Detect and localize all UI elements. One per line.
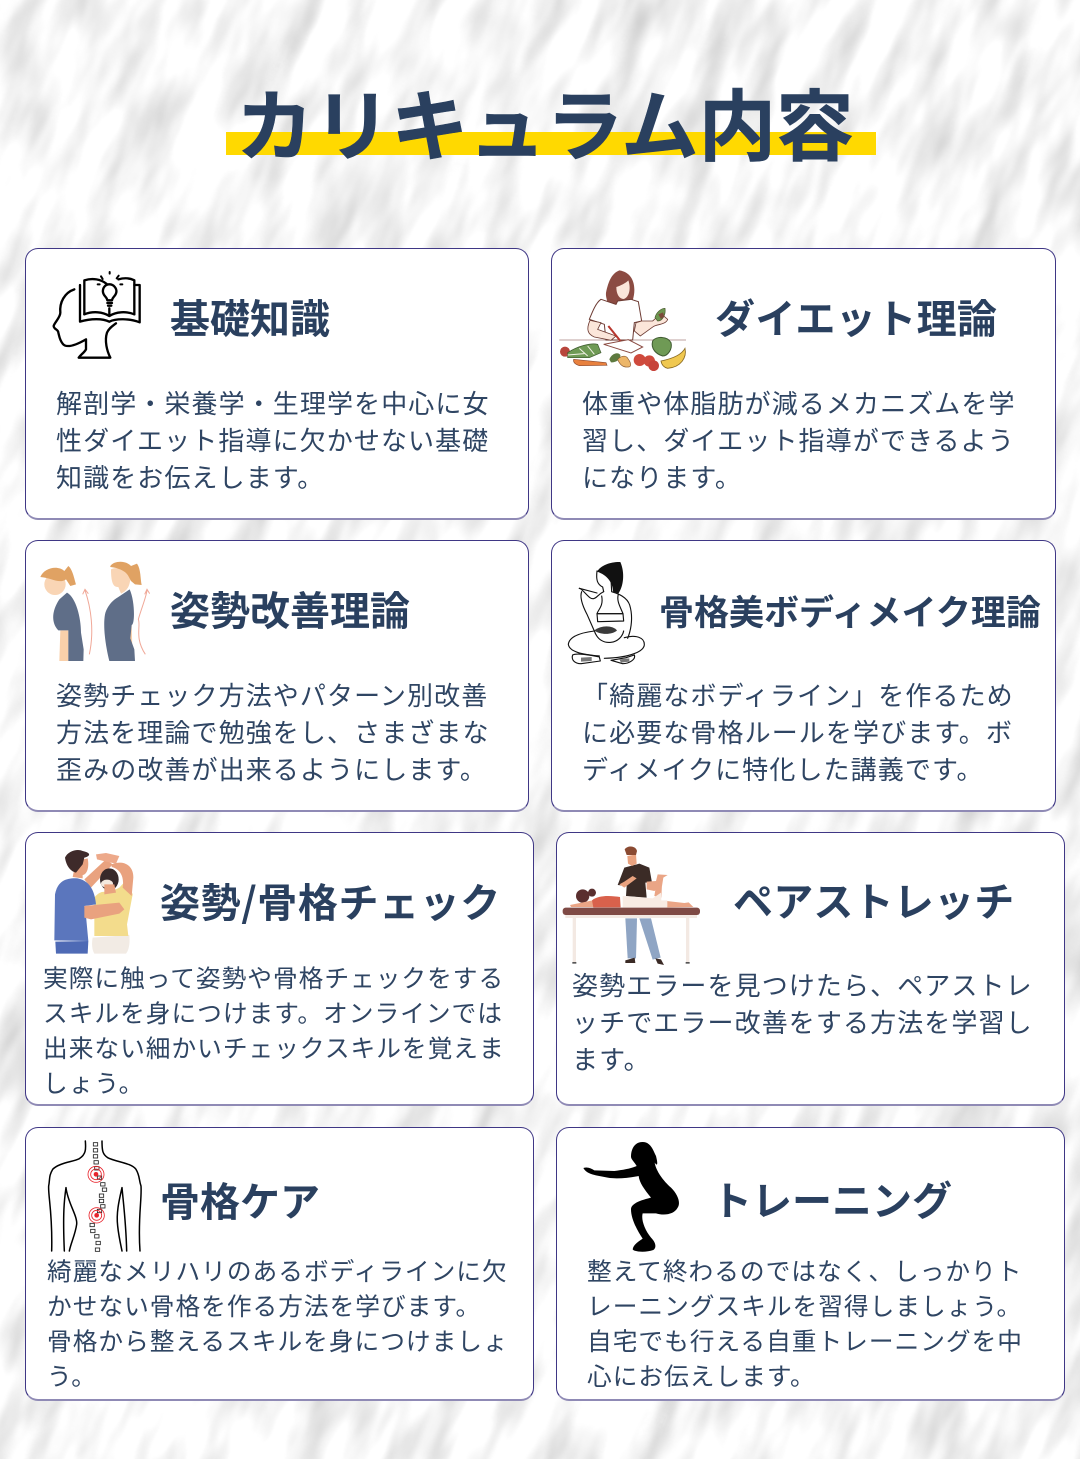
description: 体重や体脂肪が減るメカニズムを学	[582, 389, 1016, 419]
description: 知識をお伝えします。	[56, 463, 324, 493]
heading: 基礎知識	[170, 298, 330, 342]
icon: head with open book and light bulb	[52, 271, 141, 359]
description: 習し、ダイエット指導ができるよう	[582, 426, 1015, 456]
description: スキルを身につけます。オンラインでは	[43, 1001, 503, 1028]
description: 自宅でも行える自重トレーニングを中	[587, 1329, 1023, 1356]
description: 解剖学・栄養学・生理学を中心に女	[56, 389, 490, 419]
description: う。	[47, 1364, 97, 1391]
description	[572, 971, 1033, 1075]
panel: トレーニング	[556, 1127, 1065, 1401]
heading: ダイエット理論	[715, 298, 997, 342]
panel: 姿勢改善理論	[25, 540, 529, 812]
panel: ダイエット理論	[551, 248, 1056, 520]
description: 「綺麗なボディライン」を作るため	[582, 681, 1014, 711]
description: になります。	[582, 463, 742, 493]
icon: woman with vegetables	[559, 270, 686, 371]
description: レーニングスキルを習得しましょう。	[587, 1294, 1022, 1321]
description: 姿勢エラーを見つけたら、ペアストレ	[572, 971, 1033, 1001]
description: かせない骨格を作る方法を学びます。	[47, 1294, 481, 1321]
description: ます。	[572, 1045, 651, 1075]
description: ディメイクに特化した講義です。	[582, 755, 984, 785]
description	[56, 389, 490, 493]
heading: 姿勢/骨格チェック	[160, 871, 501, 929]
heading: 骨格美ボディメイク理論	[659, 594, 1041, 633]
panel: ペアストレッチ	[556, 832, 1065, 1106]
description	[43, 966, 505, 1098]
description: 実際に触って姿勢や骨格チェックをする	[43, 966, 504, 993]
description: 整えて終わるのではなく、しっかりト	[587, 1259, 1022, 1286]
heading: ペアストレッチ	[733, 881, 1014, 925]
description: 歪みの改善が出来るようにします。	[56, 755, 487, 785]
description	[582, 389, 1016, 493]
panel: 基礎知識	[25, 248, 529, 520]
panel: 姿勢/骨格チェック	[25, 832, 534, 1106]
heading: 姿勢改善理論	[170, 590, 410, 634]
description: 方法を理論で勉強をし、さまざまな	[56, 718, 490, 748]
title	[226, 85, 876, 171]
icon: posture comparison	[40, 562, 150, 661]
description	[47, 1259, 509, 1391]
icon: therapist checking posture	[54, 850, 134, 954]
icon: seated woman eating	[568, 562, 645, 664]
description: 姿勢チェック方法やパターン別改善	[56, 681, 488, 711]
description: ッチでエラー改善をする方法を学習し	[572, 1008, 1033, 1038]
description	[587, 1259, 1023, 1391]
description: 性ダイエット指導に欠かせない基礎	[56, 426, 489, 456]
description	[582, 681, 1014, 785]
heading: トレーニング	[712, 1180, 952, 1224]
icon: pair stretch on treatment table	[562, 846, 700, 965]
description: しょう。	[43, 1071, 144, 1098]
description: 出来ない細かいチェックスキルを覚えま	[43, 1036, 505, 1063]
description: に必要な骨格ルールを学びます。ボ	[582, 718, 1013, 748]
description	[56, 681, 490, 785]
title text: カリキュラム内容	[236, 85, 854, 171]
description: 骨格から整えるスキルを身につけましょ	[47, 1329, 509, 1356]
panel: 骨格ケア	[25, 1127, 534, 1401]
icon: back with spine pain points	[48, 1140, 142, 1252]
icon: squat silhouette	[583, 1142, 679, 1252]
heading: 骨格ケア	[160, 1181, 320, 1225]
panel: 骨格美ボディメイク理論	[551, 540, 1056, 812]
description: 綺麗なメリハリのあるボディラインに欠	[47, 1259, 508, 1286]
title highlight band	[226, 132, 876, 155]
description: 心にお伝えします。	[587, 1364, 816, 1391]
